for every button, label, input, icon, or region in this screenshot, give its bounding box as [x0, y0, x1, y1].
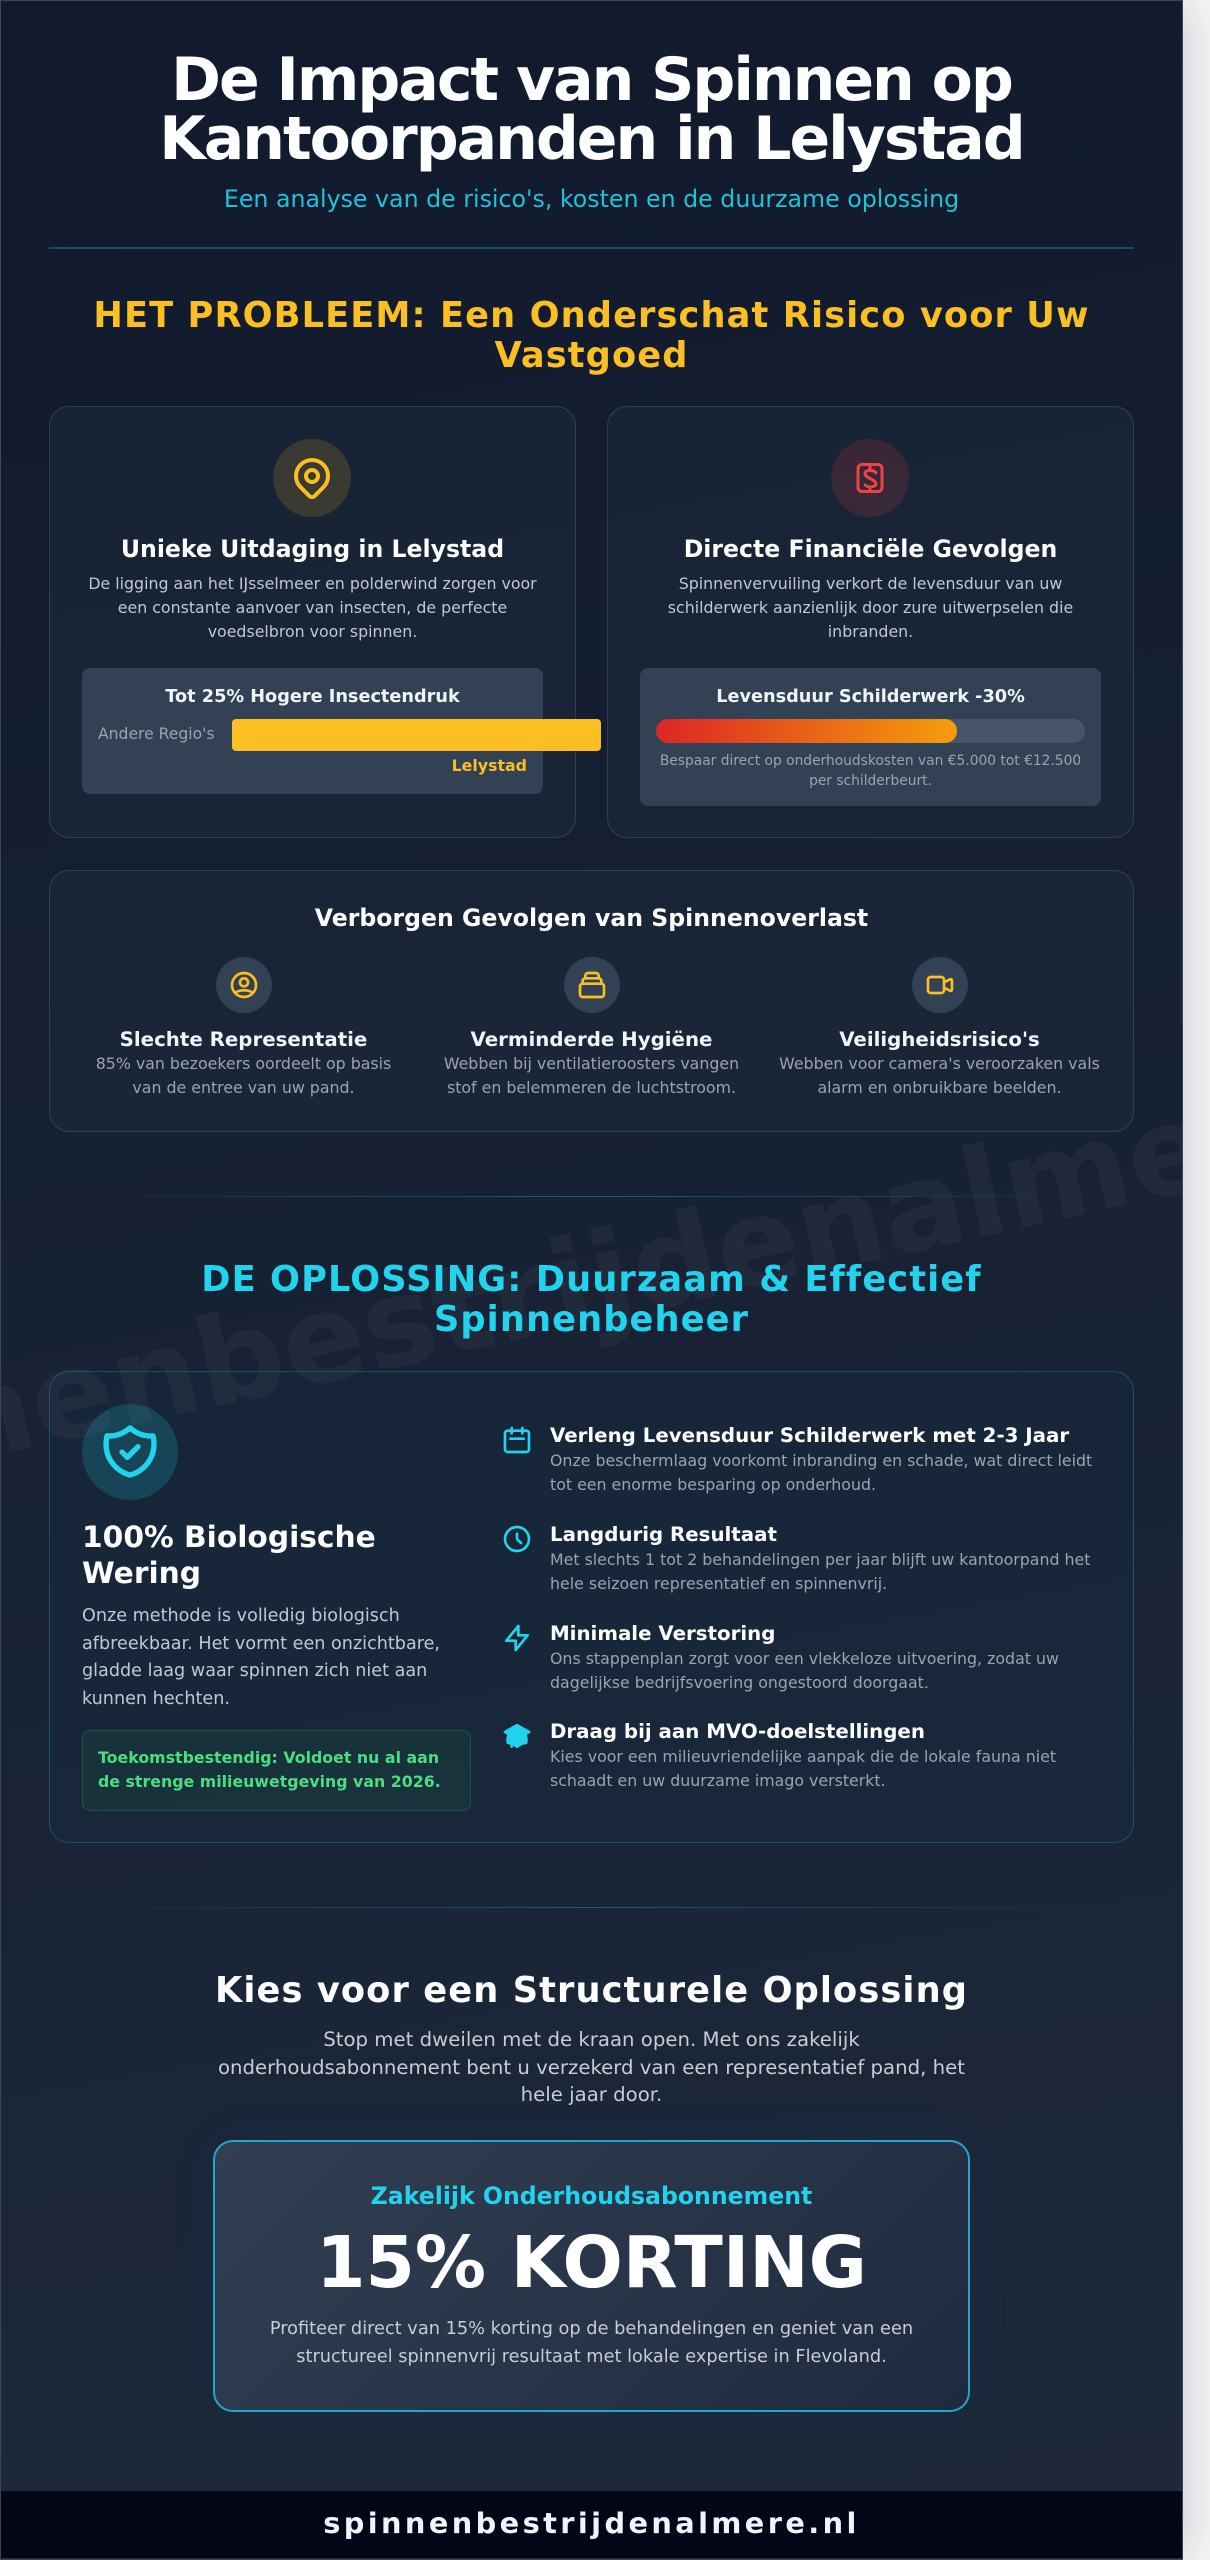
icon: video camera — [912, 957, 968, 1013]
subtitle: Een analyse van de risico's, kosten en de duurzame oplossing — [224, 185, 959, 213]
title — [159, 45, 1024, 174]
icon: calendar — [504, 1426, 530, 1454]
stat box: insectendruk — [82, 668, 543, 794]
heading: cta: Kies voor een Structurele Oplossing — [215, 1970, 968, 2011]
callout: toekomstbestendig: Toekomstbestendig: Voldoet nu al aan de strenge milieuwetgeving van 2026. — [98, 1748, 441, 1791]
icon: lightning — [504, 1624, 530, 1652]
stat box: levensduur — [640, 668, 1101, 806]
panel: financiele gevolgen — [607, 406, 1134, 838]
bar — [232, 719, 601, 751]
benefit title: Minimale Verstoring — [550, 1622, 775, 1645]
icon: money — [831, 439, 909, 517]
icon: map pin — [273, 439, 351, 517]
heading: het probleem: HET PROBLEEM: Een Onderschat Risico voor Uw Vastgoed — [93, 295, 1090, 376]
offer label: Zakelijk Onderhoudsabonnement — [371, 2182, 812, 2210]
benefit text: Kies voor een milieuvriendelijke aanpak die de lokale fauna niet schaadt en uw duurzame imago versterkt. — [550, 1747, 1056, 1790]
item text: 85% van bezoekers oordeelt op basis van de entree van uw pand. — [96, 1054, 391, 1097]
title: De Impact van Spinnen op — [171, 45, 1012, 115]
benefit: verstoring — [504, 1622, 1059, 1692]
item title: Verminderde Hygiëne — [470, 1028, 712, 1051]
progress fill — [656, 719, 957, 743]
icon: shield check — [82, 1404, 178, 1500]
benefit text: Met slechts 1 tot 2 behandelingen per jaar blijft uw kantoorpand het hele seizoen representatief en spinnenvrij. — [550, 1550, 1090, 1593]
benefit title: Draag bij aan MVO-doelstellingen — [550, 1720, 925, 1743]
card title: Directe Financiële Gevolgen — [684, 535, 1057, 563]
item: representatie — [96, 957, 391, 1097]
panel: unieke uitdaging — [49, 406, 576, 838]
progress bar — [656, 719, 1085, 743]
benefit title: Langdurig Resultaat — [550, 1523, 777, 1546]
stat title: Levensduur Schilderwerk -30% — [716, 687, 1025, 707]
card text: De ligging aan het IJsselmeer en polderwind zorgen voor een constante aanvoer van insecten, de perfecte voedselbron voor spinnen. — [88, 574, 537, 641]
item: hygiene — [444, 957, 739, 1097]
callout: toekomstbestendig — [82, 1730, 471, 1811]
stat title: Tot 25% Hogere Insectendruk — [165, 687, 460, 707]
card title: Unieke Uitdaging in Lelystad — [121, 535, 504, 563]
bar value label: Lelystad — [452, 756, 527, 775]
item title: Slechte Representatie — [120, 1028, 367, 1051]
bar label: Andere Regio's — [98, 725, 215, 743]
benefit: levensduur — [504, 1424, 1092, 1494]
footer — [1, 2491, 1182, 2558]
icon: academic cap — [504, 1724, 530, 1748]
card text: Spinnenvervuiling verkort de levensduur van uw schilderwerk aanzienlijk door zure uitwerpselen die inbranden. — [668, 574, 1073, 641]
offer text: Profiteer direct van 15% korting op de behandelingen en geniet van een structureel spinnenvrij resultaat met lokale expertise in Flevoland. — [270, 2319, 913, 2367]
panel: oplossing — [49, 1371, 1134, 1843]
offer value: 15% KORTING — [316, 2221, 867, 2304]
benefit: resultaat — [504, 1523, 1090, 1593]
benefit title: Verleng Levensduur Schilderwerk met 2-3 Jaar — [550, 1424, 1069, 1447]
solution title: 100% Biologische Wering — [82, 1520, 376, 1591]
item text: Webben voor camera's veroorzaken vals alarm en onbruikbare beelden. — [779, 1054, 1100, 1097]
benefit text: Ons stappenplan zorgt voor een vlekkeloze uitvoering, zodat uw dagelijkse bedrijfsvoering ongestoord doorgaat. — [550, 1649, 1059, 1692]
item title: Veiligheidsrisico's — [839, 1028, 1040, 1051]
panel: verborgen gevolgen — [49, 870, 1134, 1132]
note: Bespaar direct op onderhoudskosten van €5.000 tot €12.500 per schilderbeurt. — [660, 753, 1081, 789]
item text: Webben bij ventilatieroosters vangen stof en belemmeren de luchtstroom. — [444, 1054, 739, 1097]
solution text: Onze methode is volledig biologisch afbreekbaar. Het vormt een onzichtbare, gladde laag waar spinnen zich niet aan kunnen hechten. — [82, 1606, 440, 1709]
heading: de oplossing: DE OPLOSSING: Duurzaam & Effectief Spinnenbeheer — [201, 1259, 982, 1340]
icon: clock — [504, 1526, 530, 1552]
benefit text: Onze beschermlaag voorkomt inbranding en schade, wat direct leidt tot een enorme besparing op onderhoud. — [550, 1451, 1092, 1494]
offer box — [213, 2140, 970, 2412]
panel heading: Verborgen Gevolgen van Spinnenoverlast — [315, 904, 868, 932]
title: Kantoorpanden in Lelystad — [159, 104, 1024, 174]
icon: user — [216, 957, 272, 1013]
item: veiligheid — [779, 957, 1100, 1097]
cta text: Stop met dweilen met de kraan open. Met ons zakelijk onderhoudsabonnement bent u verzekerd van een representatief pand, het hele jaar door. — [218, 2028, 965, 2106]
footer url: spinnenbestrijdenalmere.nl — [323, 2506, 860, 2540]
icon: collection — [564, 957, 620, 1013]
benefit: mvo — [504, 1720, 1056, 1790]
